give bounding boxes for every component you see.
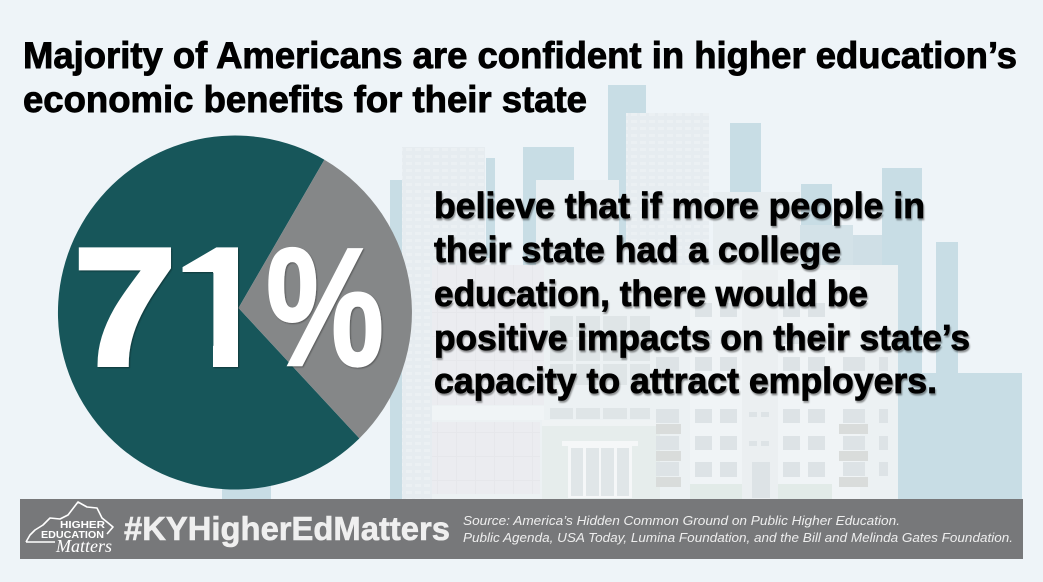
big number 71%: 1 bbox=[172, 213, 276, 401]
main building bbox=[432, 265, 898, 499]
apartment windows bbox=[656, 303, 888, 498]
title: economic benefits for their state bbox=[23, 79, 587, 120]
title: Majority of Americans are confident in higher education’s bbox=[23, 35, 1017, 76]
statement text: education, there would be bbox=[434, 273, 868, 314]
slice: remainder bbox=[238, 160, 412, 438]
source: Source: America’s Hidden Common Ground on Public Higher Education. bbox=[463, 513, 900, 528]
statement text bbox=[434, 185, 970, 401]
logo: Higher Education Matters bbox=[26, 502, 113, 556]
blue background towers bbox=[222, 85, 1022, 499]
big number 71% bbox=[78, 246, 383, 370]
source bbox=[463, 513, 1013, 545]
grey window towers bbox=[402, 147, 485, 499]
glass section windows bbox=[550, 316, 650, 419]
statement text: believe that if more people in bbox=[434, 185, 925, 226]
logo: Higher Education Matters: EDUCATION bbox=[41, 529, 104, 541]
icon: Kentucky outline bbox=[26, 502, 113, 542]
source: Public Agenda, USA Today, Lumina Foundation, and the Bill and Melinda Gates Foundation. bbox=[463, 530, 1013, 545]
slice: 71 percent bbox=[58, 136, 359, 490]
entrance door bbox=[562, 441, 638, 498]
hashtag: #KYHigherEdMatters bbox=[124, 510, 450, 547]
skyline illustration bbox=[222, 85, 1022, 499]
balconies bbox=[656, 424, 868, 487]
title bbox=[23, 35, 1017, 120]
pie chart: 71 percent bbox=[58, 136, 412, 490]
logo: Higher Education Matters: HIGHER bbox=[60, 519, 105, 531]
logo: Higher Education Matters: Matters bbox=[55, 536, 112, 556]
big number 71%: 7 bbox=[73, 213, 177, 401]
statement text: capacity to attract employers. bbox=[434, 360, 937, 401]
big number 71%: % bbox=[266, 213, 384, 401]
footer bar bbox=[20, 499, 1023, 559]
statement text: positive impacts on their state’s bbox=[434, 317, 970, 358]
statement text: their state had a college bbox=[434, 229, 841, 270]
